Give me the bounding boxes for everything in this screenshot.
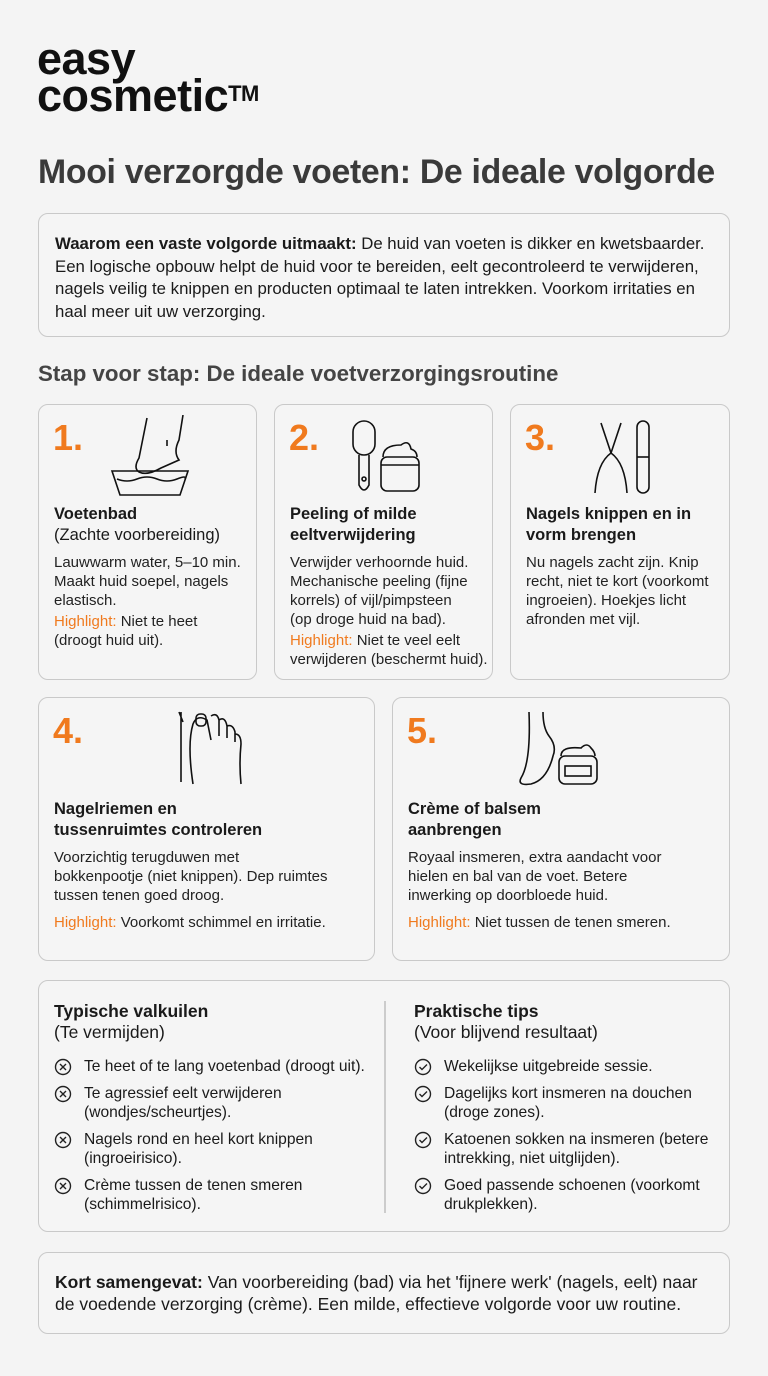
icon: foot bath [110, 415, 190, 496]
pitfalls list: (schimmelrisico). [84, 1196, 201, 1213]
subheading: Stap voor stap: De ideale voetverzorgingsroutine [38, 361, 558, 386]
card 4: tussen tenen goed droog. [54, 887, 224, 904]
title: Mooi verzorgde voeten: De ideale volgorde [38, 153, 715, 191]
logo [37, 33, 259, 121]
card 5: aanbrengen [408, 821, 502, 839]
card 5: 5. [407, 710, 437, 751]
card 5: inwerking op doorbloede huid. [408, 887, 608, 904]
card 5: Highlight: Niet tussen de tenen smeren. [408, 914, 671, 931]
intro box: Een logische opbouw helpt de huid voor te bereiden, eelt gecontroleerd te verwijderen, [55, 256, 699, 276]
card 1: Highlight: Niet te heet [54, 613, 197, 630]
intro box: haal meer uit uw verzorging. [55, 302, 266, 320]
pitfalls list: Te heet of te lang voetenbad (droogt uit). [84, 1058, 365, 1075]
tips list: Katoenen sokken na insmeren (betere [444, 1131, 708, 1148]
card 1: (droogt huid uit). [54, 632, 163, 649]
card 1: 1. [53, 417, 83, 458]
card 4: 4. [53, 710, 83, 751]
card 2: verwijderen (beschermt huid). [290, 651, 488, 668]
summary box [38, 1252, 730, 1334]
tips list: intrekking, niet uitglijden). [444, 1150, 620, 1167]
pitfalls heading [54, 1001, 208, 1042]
card 3: ingroeien). Hoekjes licht [526, 592, 686, 609]
card 5 [392, 697, 730, 961]
card 4: Voorzichtig terugduwen met [54, 849, 239, 866]
card 2: Mechanische peeling (fijne [290, 573, 468, 590]
pitfalls list: (wondjes/scheurtjes). [84, 1104, 231, 1121]
card 4: Highlight: Voorkomt schimmel en irritatie. [54, 914, 326, 931]
card 3: 3. [525, 417, 555, 458]
card 1: Maakt huid soepel, nagels [54, 573, 228, 590]
card 2: Peeling of milde [290, 505, 417, 523]
tips heading [414, 1001, 598, 1042]
card 4 [38, 697, 375, 961]
intro box: nagels veilig te knippen en producten optimaal te laten intrekken. Voorkom irritaties en [55, 279, 695, 298]
card 5: Royaal insmeren, extra aandacht voor [408, 849, 661, 866]
pitfalls list: Crème tussen de tenen smeren [84, 1177, 302, 1194]
intro box [38, 213, 730, 337]
card 3: Nagels knippen en in [526, 505, 691, 523]
card 2 [274, 404, 493, 680]
icon: nail clipper and file [594, 420, 650, 494]
card 1: elastisch. [54, 592, 117, 609]
card 2: (op droge huid na bad). [290, 611, 446, 628]
tips list: Dagelijks kort insmeren na douchen [444, 1085, 692, 1102]
pitfalls list: Te agressief eelt verwijderen [84, 1085, 282, 1102]
card 1 [38, 404, 257, 680]
card 4: Nagelriemen en [54, 800, 177, 818]
summary box: Kort samengevat: Van voorbereiding (bad) via het 'fijnere werk' (nagels, eelt) naar [55, 1272, 698, 1292]
icon: cuticle pusher and toes [178, 712, 242, 784]
card 5: Crème of balsem [408, 800, 541, 818]
tips list [414, 1058, 708, 1213]
card 2: 2. [289, 417, 319, 458]
tips list: drukplekken). [444, 1196, 538, 1213]
card 3: vorm brengen [526, 526, 636, 544]
pitfalls heading: (Te vermijden) [54, 1022, 165, 1042]
card 4: tussenruimtes controleren [54, 821, 262, 839]
pitfalls list [54, 1058, 365, 1213]
card 1: Lauwwarm water, 5–10 min. [54, 554, 241, 571]
intro box: Waarom een vaste volgorde uitmaakt: De huid van voeten is dikker en kwetsbaarder. [55, 234, 704, 253]
card 5: hielen en bal van de voet. Betere [408, 868, 627, 885]
card 3: Nu nagels zacht zijn. Knip [526, 554, 699, 571]
card 2: korrels) of vijl/pimpsteen [290, 592, 452, 609]
tips list: Goed passende schoenen (voorkomt [444, 1177, 700, 1194]
card 3 [510, 404, 730, 680]
tips heading: Praktische tips [414, 1001, 538, 1021]
card 2: Highlight: Niet te veel eelt [290, 632, 460, 649]
card 1: Voetenbad [54, 505, 137, 523]
card 2: Verwijder verhoornde huid. [290, 554, 468, 571]
card 4: bokkenpootje (niet knippen). Dep ruimtes [54, 868, 328, 885]
card 1: (Zachte voorbereiding) [54, 526, 220, 544]
pitfalls list: Nagels rond en heel kort knippen [84, 1131, 313, 1148]
logo: easy [37, 33, 135, 84]
summary box: de voedende verzorging (crème). Een milde, effectieve volgorde voor uw routine. [55, 1294, 681, 1314]
icon: pumice and cream [352, 420, 420, 492]
card 3: recht, niet te kort (voorkomt [526, 573, 709, 590]
tips heading: (Voor blijvend resultaat) [414, 1022, 598, 1042]
tips list: (droge zones). [444, 1104, 545, 1121]
logo: cosmeticTM [37, 70, 259, 121]
pitfalls heading: Typische valkuilen [54, 1001, 208, 1021]
pitfalls list: (ingroeirisico). [84, 1150, 182, 1167]
card 3: afronden met vijl. [526, 611, 640, 628]
tips list: Wekelijkse uitgebreide sessie. [444, 1058, 653, 1075]
panel: pitfalls and tips [38, 980, 730, 1232]
icon: foot and cream jar [519, 712, 598, 786]
card 2: eeltverwijdering [290, 526, 416, 544]
